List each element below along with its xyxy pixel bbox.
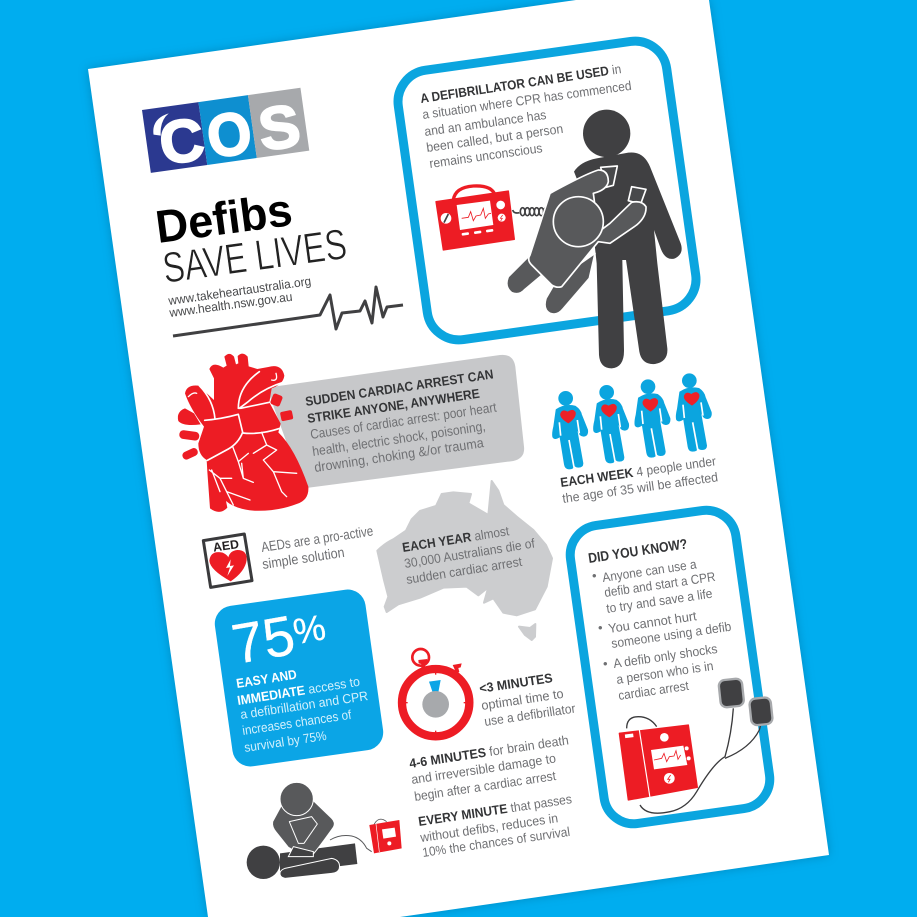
fact list: You cannot hurt [607, 608, 698, 636]
person 4 [677, 373, 711, 451]
text: easy and immediate: IMMEDIATE access to [236, 674, 361, 708]
text: AEDs are pro-active: simple solution [261, 544, 346, 572]
panel text: when to use: A DEFIBRILLATOR CAN BE USED in [419, 61, 622, 106]
logo: COS: O [203, 98, 256, 171]
fact list: • [598, 620, 603, 635]
icon: AED sign [203, 534, 252, 587]
icon: stopwatch [402, 649, 469, 736]
text: causes of cardiac arrest: Causes of cardiac arrest: poor heart [309, 400, 498, 442]
fact list: a person who is in [615, 658, 714, 687]
icon: red defibrillator with pads [619, 678, 773, 813]
text: time statistics: optimal time to [480, 686, 565, 713]
icon: CPR scene with small defibrillator [247, 782, 402, 879]
website links: www.takeheartaustralia.org [167, 274, 312, 308]
icon: standing person carrying casualty [507, 110, 682, 368]
text: each year [401, 523, 536, 587]
text: time statistics: 10% the chances of survival [421, 824, 571, 860]
text: each week: the age of 35 will be affected [561, 469, 719, 506]
title: Defibs Save Lives: Defibs [152, 183, 295, 253]
panel text: when to use: and an ambulance has [423, 107, 548, 139]
icon: AED sign: AED [212, 537, 240, 555]
text: each year: 30,000 Australians die of [403, 535, 536, 571]
fact list: A defib only shocks [612, 641, 719, 671]
person 3 [635, 379, 669, 457]
person 2 [594, 385, 628, 463]
website links [167, 274, 312, 320]
text: easy and immediate: a defibrillation and CPR [239, 688, 369, 722]
icon: four blue people with hearts [553, 373, 711, 469]
text: time statistics: <3 MINUTES [478, 670, 554, 696]
panel text: when to use: a situation where CPR has commenced [421, 78, 632, 122]
panel text: when to use: remains unconscious [428, 140, 544, 171]
fact list: to try and save a life [605, 586, 713, 616]
fact list: • [603, 656, 608, 671]
fact list: cardiac arrest [617, 678, 690, 703]
panel: 75% survival [212, 587, 386, 769]
map: Australia with statistic [377, 481, 552, 640]
text: time statistics: use a defibrillator [483, 700, 577, 729]
text: easy and immediate: survival by 75% [243, 728, 328, 755]
icon: anatomical heart [178, 354, 308, 512]
fact list: Anyone can use a [601, 556, 698, 585]
panel text: when to use [419, 61, 632, 171]
logo: COS [142, 88, 310, 179]
person 1 [553, 391, 587, 469]
text: time statistics: begin after a cardiac arrest [413, 768, 557, 804]
text: each week [559, 453, 719, 506]
text: time statistics: EVERY MINUTE that passes [417, 791, 573, 829]
logo: COS: C [155, 105, 208, 178]
fact list: • [592, 568, 597, 583]
fact list: defib and start a CPR [603, 569, 716, 600]
icon: red defibrillator with coil [436, 186, 548, 250]
text: causes of cardiac arrest: drowning, choking &/or trauma [313, 435, 485, 475]
panel: sudden cardiac arrest [267, 355, 524, 488]
big number: 75%: 75 [227, 603, 299, 676]
heading: did you know: DID YOU KNOW? [587, 535, 688, 566]
logo: COS: S [254, 92, 304, 164]
text: each year: sudden cardiac arrest [405, 554, 523, 587]
fact list: someone using a defib [610, 619, 732, 651]
text: causes of cardiac arrest: health, electric shock, poisoning, [311, 419, 487, 459]
text: AEDs are pro-active: AEDs are a pro-active [260, 522, 374, 555]
website links: www.health.nsw.gov.au [168, 290, 293, 320]
text: easy and immediate: EASY AND [235, 667, 298, 691]
panel text: when to use: been called, but a person [425, 121, 564, 155]
text: time statistics: 4-6 MINUTES for brain death [408, 732, 570, 771]
text: time statistics: and irreversible damage to [410, 751, 557, 787]
text: time statistics: without defibs, reduces in [418, 810, 559, 845]
heading: sudden cardiac arrest: STRIKE ANYONE, ANYWHERE [306, 386, 481, 426]
title: Defibs Save Lives: SAVE LIVES [160, 220, 350, 293]
text: causes of cardiac arrest [309, 400, 498, 475]
title: Defibs Save Lives [152, 183, 350, 293]
big number: 75%: % [290, 606, 329, 652]
panel: did you know [566, 506, 774, 828]
heartbeat line [173, 287, 403, 336]
text: time statistics [408, 670, 577, 860]
text: easy and immediate [235, 667, 369, 755]
heading: sudden cardiac arrest: SUDDEN CARDIAC ARREST CAN [304, 366, 494, 409]
text: each week: EACH WEEK 4 people under [559, 453, 717, 490]
fact list [592, 556, 732, 703]
text: AEDs are pro-active [260, 522, 374, 572]
panel: defibrillator use [394, 37, 700, 368]
text: each year: EACH YEAR almost [401, 523, 510, 555]
text: easy and immediate: increases chances of [241, 707, 353, 738]
